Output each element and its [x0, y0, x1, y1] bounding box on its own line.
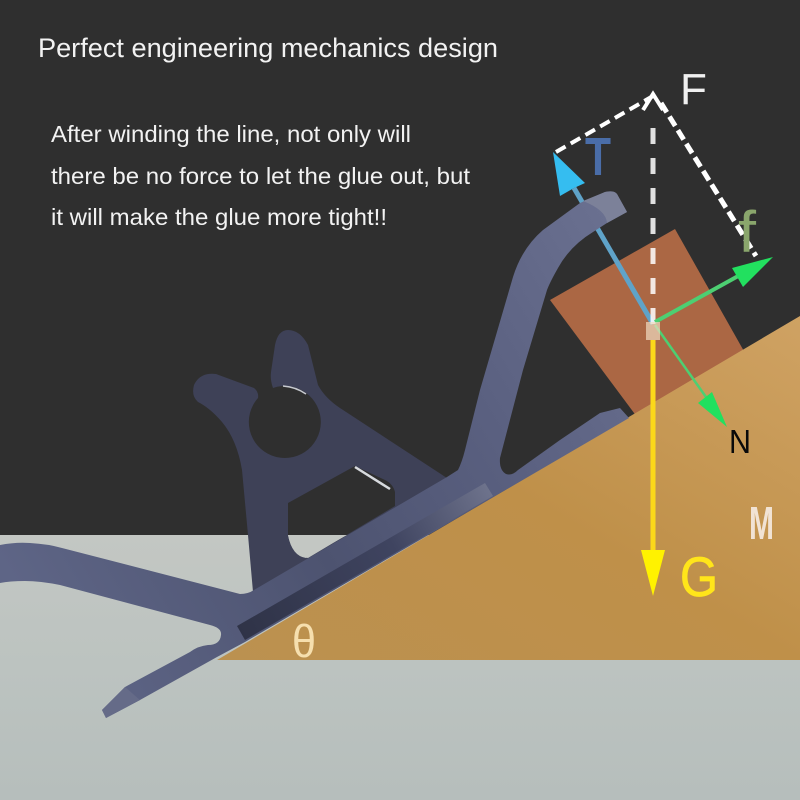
glare: hole highlights [283, 386, 390, 489]
label: F: F [680, 65, 707, 114]
text block: explanation: After winding the line, not only will [51, 121, 411, 147]
wedge: wooden incline [217, 316, 800, 660]
center point marker [646, 322, 660, 340]
bracket: arm tip highlight [583, 191, 627, 223]
label: M: M [749, 497, 774, 549]
text block: explanation: there be no force to let the glue out, but [51, 163, 471, 189]
background: dark wall [0, 0, 800, 536]
arrow: N normal force (green) [655, 325, 727, 427]
bracket: foot tip highlight [102, 687, 140, 718]
label: T: T [585, 127, 611, 187]
text block: explanation [51, 121, 471, 230]
arrow: G gravity (yellow) [641, 340, 665, 596]
bracket: upright post with circular hole and window [193, 330, 450, 592]
label: theta angle: θ [292, 615, 316, 667]
text block: explanation: it will make the glue more tight!! [51, 204, 387, 230]
floor: grey surface [0, 535, 800, 800]
bracket: floor seen through window [288, 535, 347, 558]
bracket: arms, base strip and foot [0, 191, 629, 718]
bracket: base plate on incline [237, 483, 493, 640]
force diagram: white dashed parallelogram [556, 94, 756, 325]
label: G: G [680, 545, 718, 608]
arrow: f friction (green) [655, 257, 773, 322]
arrow: T tension (blue) [553, 152, 653, 324]
bracket: dark mounting plate and arms [0, 191, 629, 718]
label: f: f [738, 200, 757, 265]
title: Perfect engineering mechanics design [38, 33, 498, 63]
wooden block [550, 229, 745, 417]
label: N: N [729, 423, 751, 460]
